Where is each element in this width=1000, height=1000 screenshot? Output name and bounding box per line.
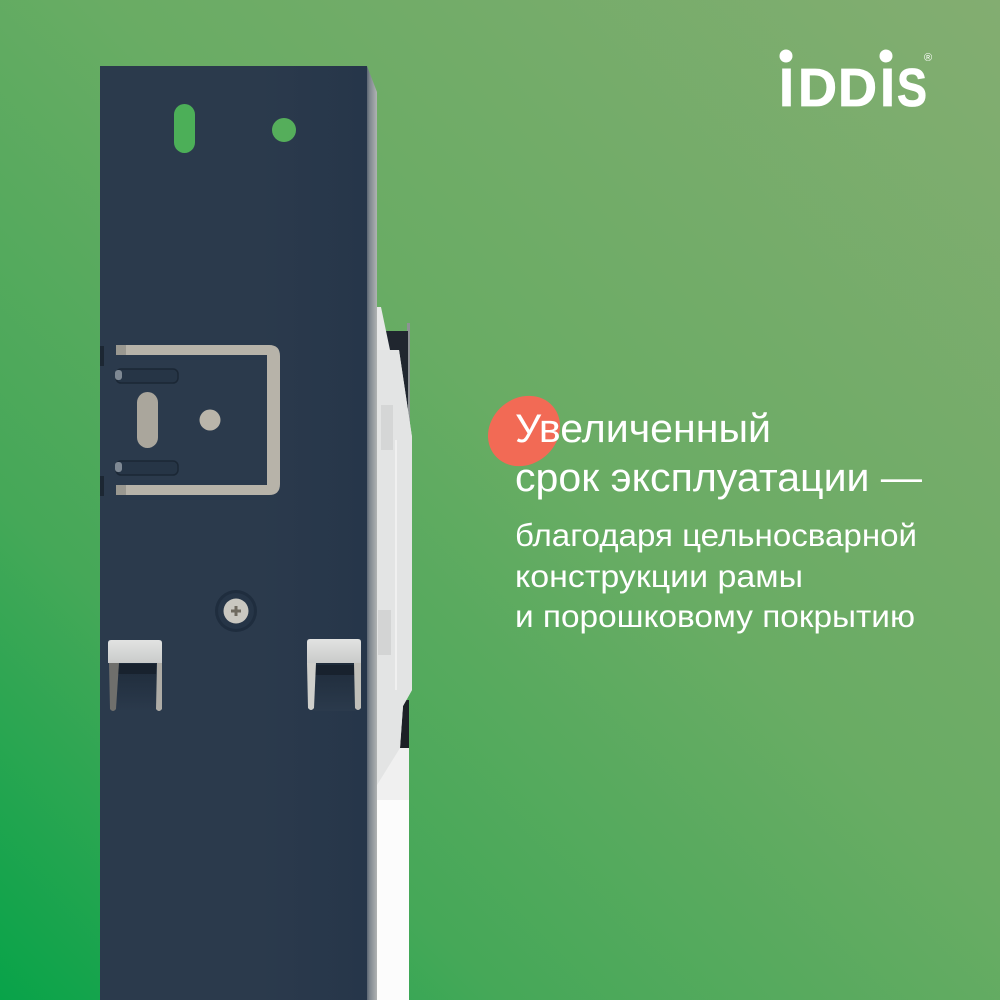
logo: iddis: S <box>897 58 927 118</box>
screw <box>215 590 257 632</box>
white rear housing <box>377 307 412 1000</box>
heading: Увеличенный <box>515 407 771 451</box>
heading: срок эксплуатации — <box>515 456 923 500</box>
mounting slot <box>174 104 195 153</box>
left clip <box>108 640 162 712</box>
heading <box>515 407 923 500</box>
frame edge strip <box>366 66 377 1000</box>
dark frame panel <box>100 66 367 1000</box>
metal bracket <box>100 345 280 496</box>
mounting hole <box>272 118 296 142</box>
product: side frame <box>100 66 412 1000</box>
description text: конструкции рамы <box>515 558 803 594</box>
right clip <box>307 639 361 711</box>
logo: iddis: IDDI <box>779 58 895 118</box>
description text <box>515 517 917 634</box>
accent blob <box>474 381 574 481</box>
description text: благодаря цельносварной <box>515 517 917 553</box>
logo: iddis <box>779 50 932 118</box>
registered mark: ® <box>924 52 932 64</box>
description text: и порошковому покрытию <box>515 598 915 634</box>
